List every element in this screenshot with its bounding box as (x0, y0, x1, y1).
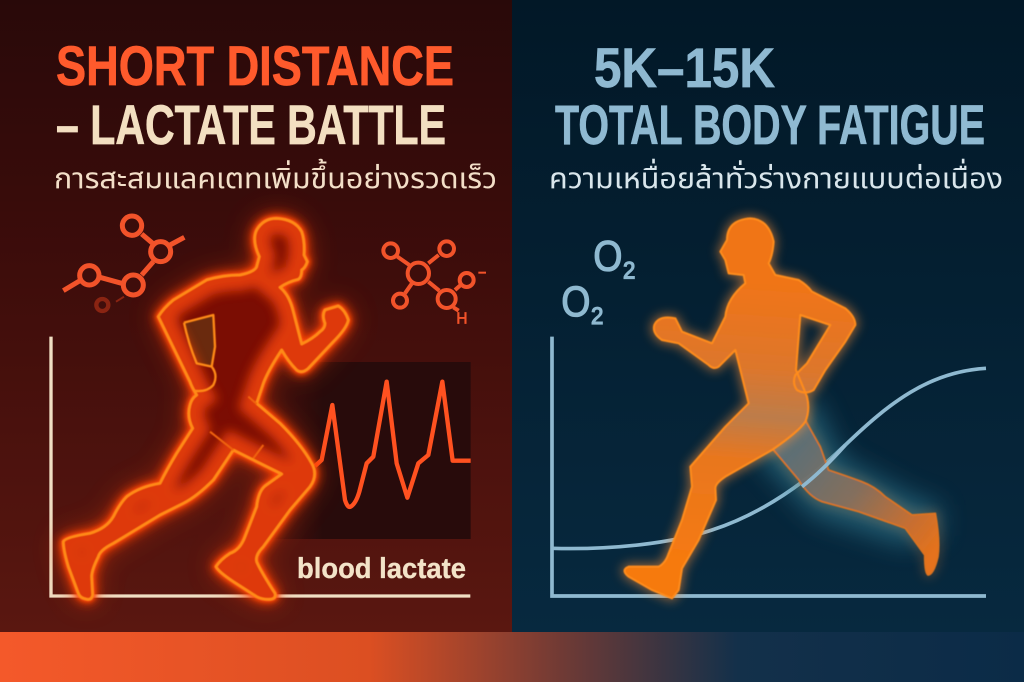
lactate spike line (315, 382, 471, 507)
molecule: left (63, 216, 184, 311)
panel: short distance background (0, 0, 512, 632)
chart label: blood lactate: blood lactate (297, 553, 466, 585)
subtitle: Thai right: ความเหนื่อยล้าทั่วร่างกายแบบต่อเนื่อง (549, 158, 1003, 195)
heading: 5K-15K total body fatigue (555, 36, 985, 156)
heading: short distance lactate battle: – LACTATE BATTLE (56, 93, 446, 156)
oxygen label lower: O (561, 278, 590, 326)
fatigue curve (552, 368, 986, 549)
runner: back leg fading (772, 420, 939, 575)
runner: glowing orange figure (624, 218, 855, 598)
heading: short distance lactate battle (56, 34, 454, 156)
fatigue curve over leg (802, 445, 845, 487)
right panel illustration (552, 218, 986, 598)
oxygen label lower: 2 (591, 303, 603, 330)
oxygen label upper: 2 (623, 257, 635, 284)
heading: 5K-15K total body fatigue: 5K–15K (594, 36, 775, 99)
molecule: right (383, 241, 486, 311)
oxygen label upper: O (593, 232, 622, 280)
subtitle: Thai left: การสะสมแลคเตทเพิ่มขึ้นอย่างรวดเร็ว (54, 158, 497, 195)
left panel illustration (51, 216, 486, 599)
heading: short distance lactate battle: SHORT DISTANCE (56, 34, 454, 97)
chart axes (552, 337, 986, 596)
figure haze (772, 420, 935, 528)
runner: glowing red figure (63, 218, 348, 599)
panel: 5K-15K background (512, 0, 1024, 632)
molecule label H: H (456, 310, 467, 327)
chart axes (51, 337, 470, 596)
lactate chart backdrop (260, 362, 471, 539)
bottom gradient bar (0, 632, 1024, 682)
